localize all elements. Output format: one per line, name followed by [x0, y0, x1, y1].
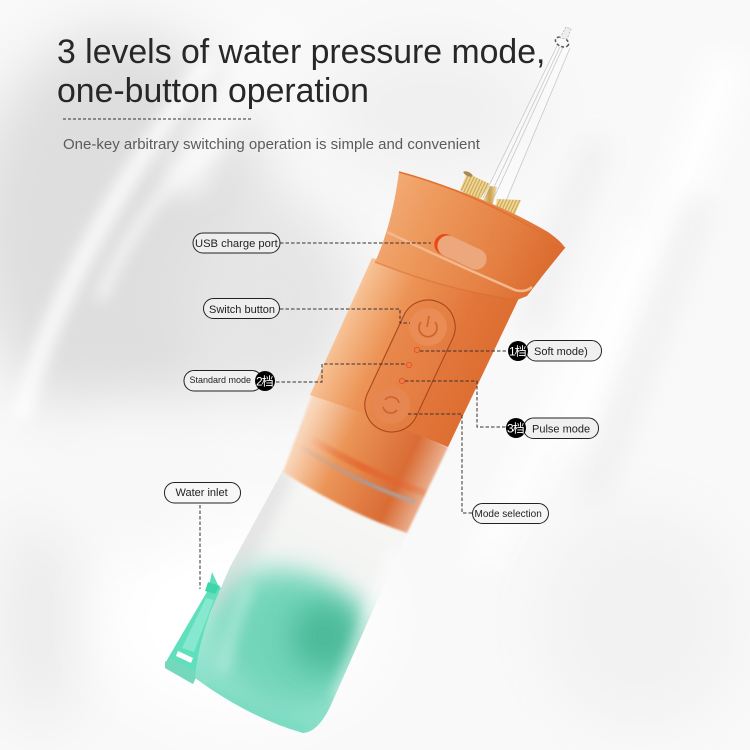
label: Mode selection: Mode selection [474, 509, 542, 520]
head [375, 172, 565, 300]
control panel pill [356, 291, 464, 441]
USB port cover [431, 231, 490, 273]
indicator lights [399, 347, 420, 384]
lower transparent tank [165, 471, 378, 733]
label: Standard mode [184, 370, 275, 391]
mode button [372, 386, 410, 424]
title: one-button operation [57, 72, 369, 110]
label: Pulse mode [506, 418, 598, 438]
label: Soft mode: Soft mode) [534, 346, 588, 358]
title divider [63, 118, 251, 120]
nozzle [483, 27, 571, 208]
water inlet clip [165, 572, 232, 684]
leader lines [200, 243, 508, 589]
subtitle: One-key arbitrary switching operation is simple and convenient [63, 136, 481, 153]
title: 3 levels of water pressure mode, [57, 33, 545, 71]
gold knobs [460, 170, 521, 219]
label: Standard mode: 2档 [256, 374, 274, 388]
power button [409, 308, 447, 346]
label: Water inlet [164, 482, 240, 503]
label: Switch button: Switch button [209, 304, 275, 316]
orange mid body [310, 258, 520, 447]
label: USB charge port: USB charge port [195, 238, 279, 250]
label: Standard mode: Standard mode [190, 375, 251, 385]
label: USB charge port [193, 233, 280, 253]
device: water flosser [165, 27, 571, 733]
label: Mode selection [472, 504, 548, 524]
orange lower section [283, 392, 448, 533]
label: Soft mode: 1档 [509, 344, 527, 358]
label: Water inlet: Water inlet [176, 487, 228, 499]
title [57, 33, 545, 110]
label: Switch button [204, 298, 280, 318]
label: Pulse mode: 3档 [507, 422, 525, 436]
label: Pulse mode: Pulse mode [532, 424, 590, 436]
label: Soft mode [508, 340, 602, 361]
